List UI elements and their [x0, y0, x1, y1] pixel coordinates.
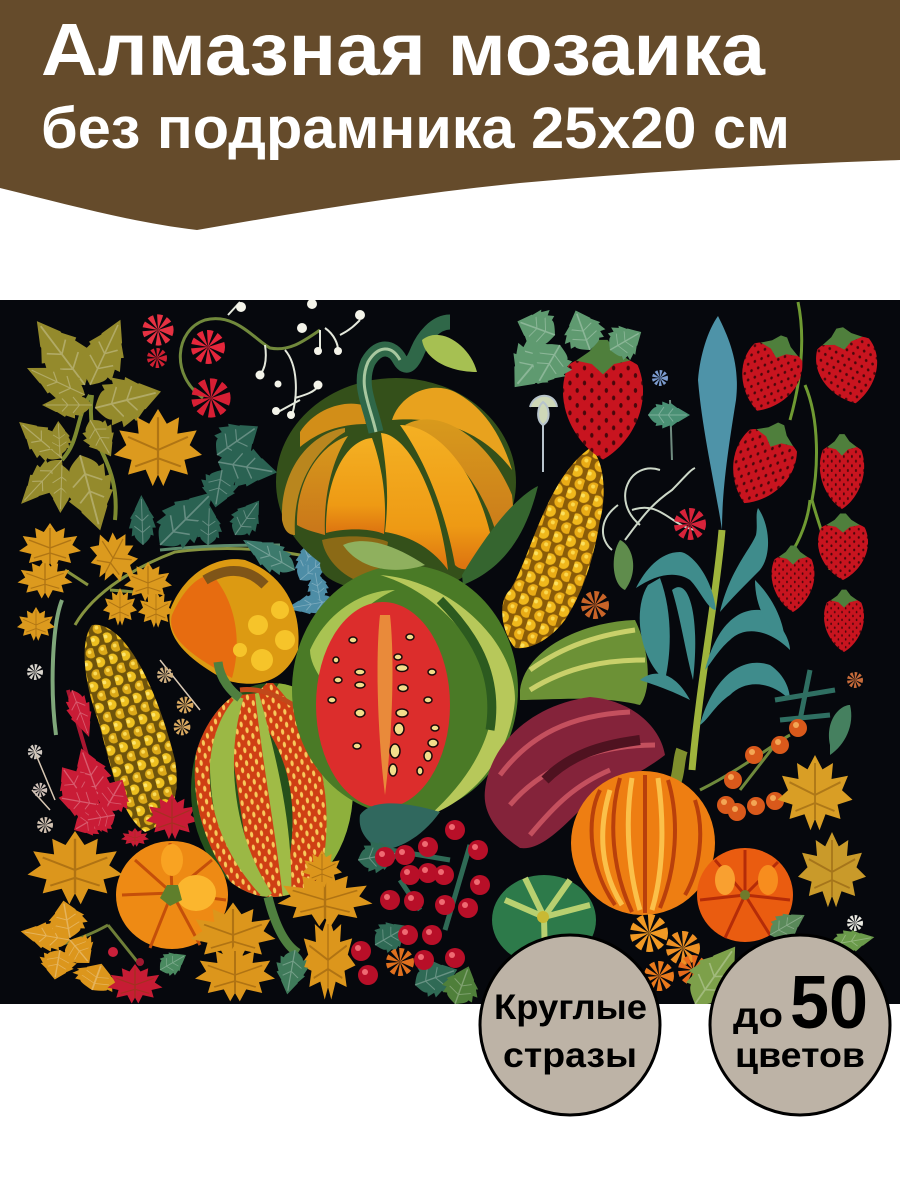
- subtitle: без подрамника 25х20 см: [41, 96, 790, 161]
- golden warty squash: [169, 559, 299, 684]
- top pumpkin: [276, 322, 516, 593]
- badge: round rhinestones: стразы: [503, 1036, 637, 1075]
- gold leaves bottom: [18, 831, 372, 1001]
- eggplant: [485, 697, 665, 848]
- badge: round rhinestones: [480, 935, 660, 1115]
- title: Алмазная мозаика: [41, 8, 766, 91]
- badge: up to 50 colours: до: [733, 996, 783, 1035]
- badge: up to 50 colours: [710, 935, 890, 1115]
- gold maple leaves upper left: [17, 409, 300, 735]
- gourd stem: [218, 662, 298, 953]
- left strawberry with leaves: [514, 310, 644, 460]
- pumpkin stem: [364, 322, 450, 432]
- watermelon seeds: [328, 634, 439, 776]
- badge: up to 50 colours: 50: [790, 960, 868, 1044]
- small dried flowers left: [31, 660, 200, 829]
- right teal plant: [530, 316, 835, 770]
- striped gourd: [191, 662, 353, 953]
- blue frond: [243, 540, 330, 614]
- olive leaves top left: [19, 320, 161, 530]
- big orange pumpkin: [571, 750, 715, 915]
- right corn: [462, 448, 604, 648]
- green leaf and red leaf bottom left: [108, 947, 478, 1004]
- red leaves left: [58, 690, 195, 847]
- green striped squash: [520, 620, 648, 705]
- header banner: [0, 0, 900, 230]
- small orange pumpkin right: [697, 848, 793, 942]
- orange berries and yellow leaves right: [700, 676, 866, 927]
- plant leaves: [636, 508, 790, 725]
- badge: round rhinestones: Круглые: [494, 988, 647, 1027]
- painting: autumn harvest vegetables on dark background: [0, 299, 900, 1018]
- red berries: [351, 820, 490, 1003]
- orange flowers bottom: [630, 914, 874, 1004]
- red flowers and white berry branches: [150, 299, 365, 419]
- teal leaves upper centre: [129, 424, 280, 552]
- left corn: [85, 625, 177, 832]
- badge: up to 50 colours: цветов: [735, 1036, 865, 1075]
- watermelon: [292, 541, 518, 850]
- strawberries right: [733, 302, 878, 652]
- green squash bottom: [492, 875, 596, 955]
- small orange pumpkin left: [116, 841, 228, 949]
